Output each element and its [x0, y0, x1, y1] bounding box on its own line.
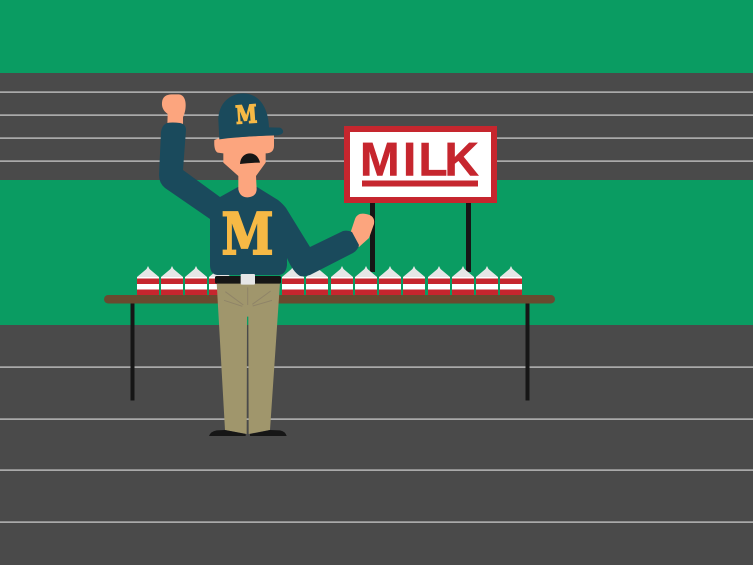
middle green band	[0, 180, 753, 325]
table legs	[130, 302, 530, 400]
cap M: M	[235, 99, 258, 130]
milk cartons row	[137, 266, 522, 295]
lower hand	[350, 214, 374, 247]
raised fist	[162, 94, 186, 127]
sign text: MILK	[360, 134, 479, 187]
sign underline	[362, 180, 478, 186]
head	[214, 93, 283, 197]
table	[104, 295, 555, 400]
belt	[215, 274, 281, 285]
table top	[104, 295, 555, 304]
trousers	[209, 283, 287, 436]
top green band	[0, 0, 753, 73]
buckle	[241, 274, 255, 285]
mustache	[240, 153, 260, 164]
sign board	[347, 129, 494, 200]
milk sign	[347, 129, 494, 272]
chest M: M	[222, 201, 274, 268]
ears, face and neck	[214, 135, 274, 197]
sweater	[159, 122, 359, 276]
sign posts	[370, 200, 471, 272]
shoes	[209, 430, 287, 436]
coach figure	[159, 93, 374, 436]
cap	[218, 93, 283, 139]
